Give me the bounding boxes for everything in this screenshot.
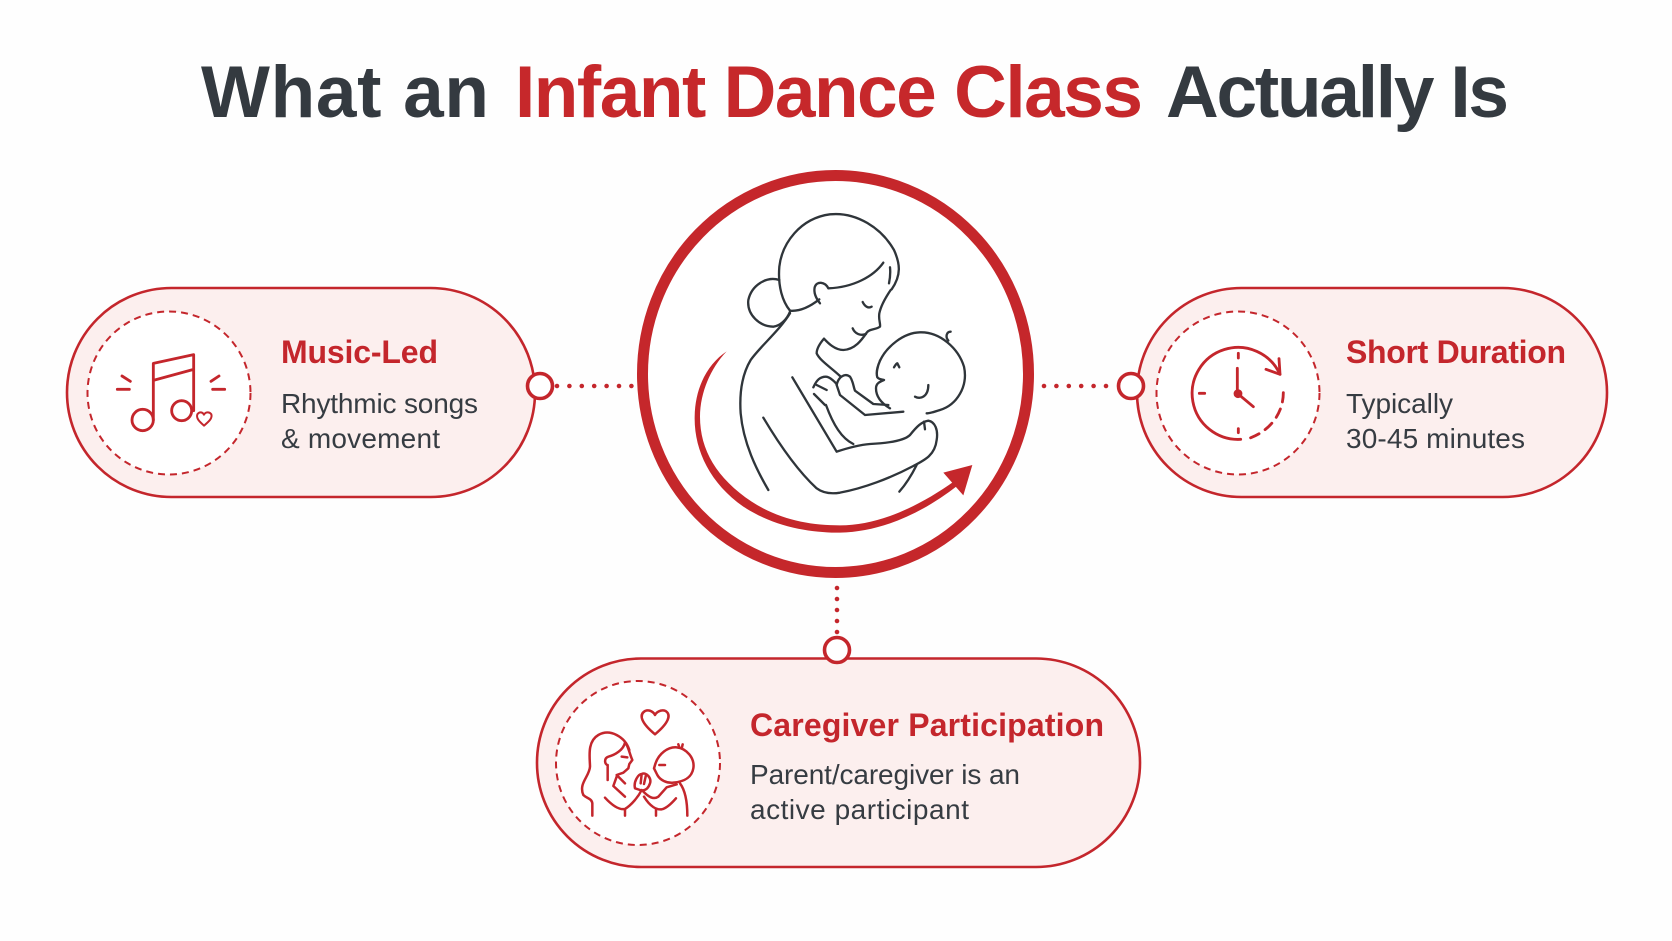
connector: bottom xyxy=(835,588,839,634)
panel: music-led xyxy=(67,288,552,497)
pill background xyxy=(1137,288,1607,497)
icon: music notes xyxy=(117,355,225,431)
panel: center illustration xyxy=(642,176,1028,572)
dashed icon circle xyxy=(88,312,250,474)
connector node xyxy=(1118,374,1144,398)
heading: Caregiver Participation xyxy=(750,707,1104,743)
panel: short duration xyxy=(1118,288,1607,497)
title: Infant Dance Class xyxy=(515,52,1143,133)
description: 30-45 minutes xyxy=(1346,423,1525,454)
icon: clock xyxy=(1192,347,1283,439)
dashed icon circle xyxy=(556,681,720,845)
panel: caregiver participation xyxy=(537,638,1140,867)
title: What an xyxy=(201,52,489,133)
illustration: caregiver holding baby xyxy=(695,214,972,533)
pill background xyxy=(537,658,1140,867)
description: Typically xyxy=(1346,388,1453,419)
heading: Short Duration xyxy=(1346,334,1566,370)
description xyxy=(750,759,1020,825)
title xyxy=(201,52,1509,133)
connector: right xyxy=(1044,384,1116,388)
pill background xyxy=(67,288,535,497)
description xyxy=(1346,388,1525,454)
center ring xyxy=(642,176,1028,572)
connector node xyxy=(528,374,552,398)
description: active participant xyxy=(750,794,969,825)
description: & movement xyxy=(281,423,440,454)
icon: caregiver and baby xyxy=(582,710,694,816)
description: Parent/caregiver is an xyxy=(750,759,1020,790)
title: Actually Is xyxy=(1166,52,1509,133)
description: Rhythmic songs xyxy=(281,388,478,419)
heading: Music-Led xyxy=(281,334,438,370)
swoosh arrow xyxy=(695,351,972,533)
connector: left xyxy=(557,384,632,388)
connector node xyxy=(824,638,850,662)
dashed icon circle xyxy=(1156,312,1320,474)
description xyxy=(281,388,478,454)
